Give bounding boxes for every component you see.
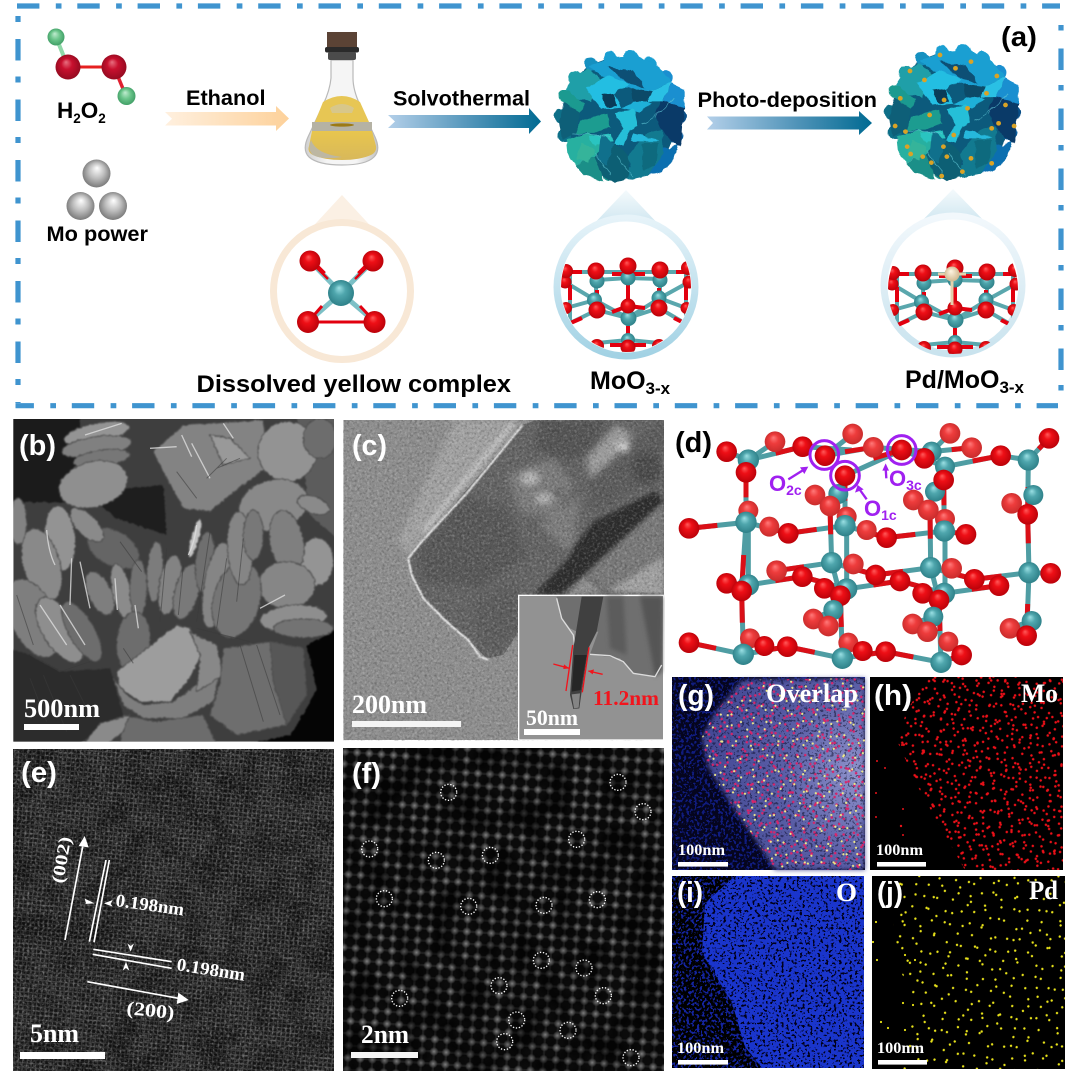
callout: MoO3-x structure magnifier: [557, 190, 696, 356]
scale bar: 100nm: 100nm: [876, 842, 924, 859]
label: O2c: O: [769, 471, 786, 496]
scale bar: 100nm: 100nm: [677, 1040, 725, 1057]
label: 11.2nm: 11.2nm: [593, 686, 660, 710]
label: Photo-deposition: Photo-deposition: [698, 88, 877, 112]
icon: flask with yellow solution: [305, 32, 378, 165]
label: Mo: Mo: [1021, 679, 1058, 708]
inset: 11.2 nm nanosheet edge: [519, 595, 664, 740]
scale bar: 5nm: 5nm: [30, 1019, 79, 1048]
scale bar: 100nm: [678, 842, 728, 867]
callout: Pd/MoO3-x structure magnifier: [884, 189, 1022, 356]
scale bar: 100nm: 100nm: [877, 1040, 925, 1057]
label: O3c: 3c: [906, 477, 922, 493]
label: panel h: (h): [874, 680, 912, 712]
label: panel j: (j): [877, 877, 903, 909]
callout: dissolved complex magnifier: [274, 195, 410, 360]
icon: Mo powder spheres: [66, 160, 127, 220]
scale bar: 50nm: 50nm: [526, 705, 578, 730]
panel h: Mo map: [870, 677, 1063, 870]
atoms: [679, 423, 1061, 673]
label: MoO3-x: 3-x: [646, 379, 671, 398]
scale bar: 200nm: 200nm: [352, 690, 427, 719]
label: O1c: 1c: [881, 507, 897, 523]
scale bar: 100nm: [677, 1040, 728, 1065]
scale bar: 5nm: [20, 1019, 105, 1059]
scale bar: 200nm: [352, 690, 461, 727]
label: Solvothermal: Solvothermal: [393, 88, 530, 110]
scale bar: 500nm: 500nm: [24, 694, 100, 723]
panel a: synthesis scheme: [16, 6, 1061, 406]
panel c: TEM image: [343, 420, 664, 741]
label: panel e: (e): [21, 757, 57, 789]
icon: H2O2 molecule: [48, 28, 136, 105]
arrow: Photo-deposition: [707, 111, 872, 135]
dotted markers for single Pd atoms: [362, 774, 651, 1066]
label: H2O2: 2: [98, 111, 106, 126]
panel d: crystal structure: [675, 423, 1061, 673]
bonds: [689, 433, 1051, 662]
label: O2c: 2c: [786, 482, 802, 498]
arrow: Ethanol: [165, 106, 289, 131]
label: Pd: Pd: [1029, 876, 1059, 905]
arrow: Solvothermal: [388, 108, 541, 134]
scale bar: 100nm: [876, 842, 926, 867]
label: panel g: (g): [678, 680, 714, 712]
label: H2O2: H: [57, 98, 73, 123]
label: H2O2: O: [81, 98, 98, 123]
label: panel c: (c): [352, 430, 387, 462]
label: panel a: (a): [1001, 21, 1037, 52]
label: panel d: (d): [675, 427, 712, 459]
label: O3c: O: [889, 466, 906, 491]
molecule: Mo-O complex: [297, 250, 386, 333]
label: O: O: [836, 878, 857, 907]
panel b: SEM image: [0, 415, 340, 745]
dash-dot frame: [16, 6, 1061, 406]
purple site markers: [788, 436, 916, 499]
label: (200): (200): [125, 998, 175, 1024]
scale bar: 2nm: [351, 1020, 418, 1058]
label: Pd/MoO3-x: Pd/MoO: [905, 366, 999, 394]
panel e: HRTEM lattice: [13, 749, 334, 1071]
label: H2O2: 2: [73, 111, 81, 126]
panel j: Pd map: [872, 876, 1065, 1069]
label: Mo power: Mo power: [46, 222, 149, 246]
structure: Pd/MoO3-x slab with Pd atom: [886, 260, 1022, 356]
label: Pd/MoO3-x: 3-x: [999, 378, 1025, 397]
label: Ethanol: Ethanol: [186, 87, 266, 110]
label: panel f: (f): [352, 758, 381, 790]
label: O1c: O: [864, 496, 881, 521]
SEM plate highlights: [40, 423, 285, 645]
scale bar: 100nm: [877, 1040, 927, 1065]
label: panel i: (i): [677, 877, 703, 909]
panel g: EDS overlap map: [672, 677, 865, 870]
label: panel b: (b): [19, 430, 56, 462]
panel i: O map: [672, 876, 864, 1068]
label: (002): (002): [47, 835, 75, 885]
scale bar: 2nm: 2nm: [361, 1020, 409, 1049]
scale bar: 100nm: 100nm: [678, 842, 726, 859]
label: 0.198nm lower: 0.198nm: [175, 954, 247, 985]
panel f: atomic-resolution image: [343, 748, 664, 1071]
label: 0.198nm upper: 0.198nm: [114, 890, 186, 920]
lattice annotations: [65, 836, 189, 1004]
icon: MoO3-x nanoflower: [555, 51, 686, 183]
icon: Pd/MoO3-x nanoflower with Pd dots: [885, 45, 1021, 181]
structure: MoO3-x slab: [558, 258, 696, 354]
label: Dissolved yellow complex: Dissolved yellow complex: [196, 371, 512, 398]
label: MoO3-x: MoO: [590, 367, 646, 395]
label: Overlap: Overlap: [766, 679, 858, 708]
